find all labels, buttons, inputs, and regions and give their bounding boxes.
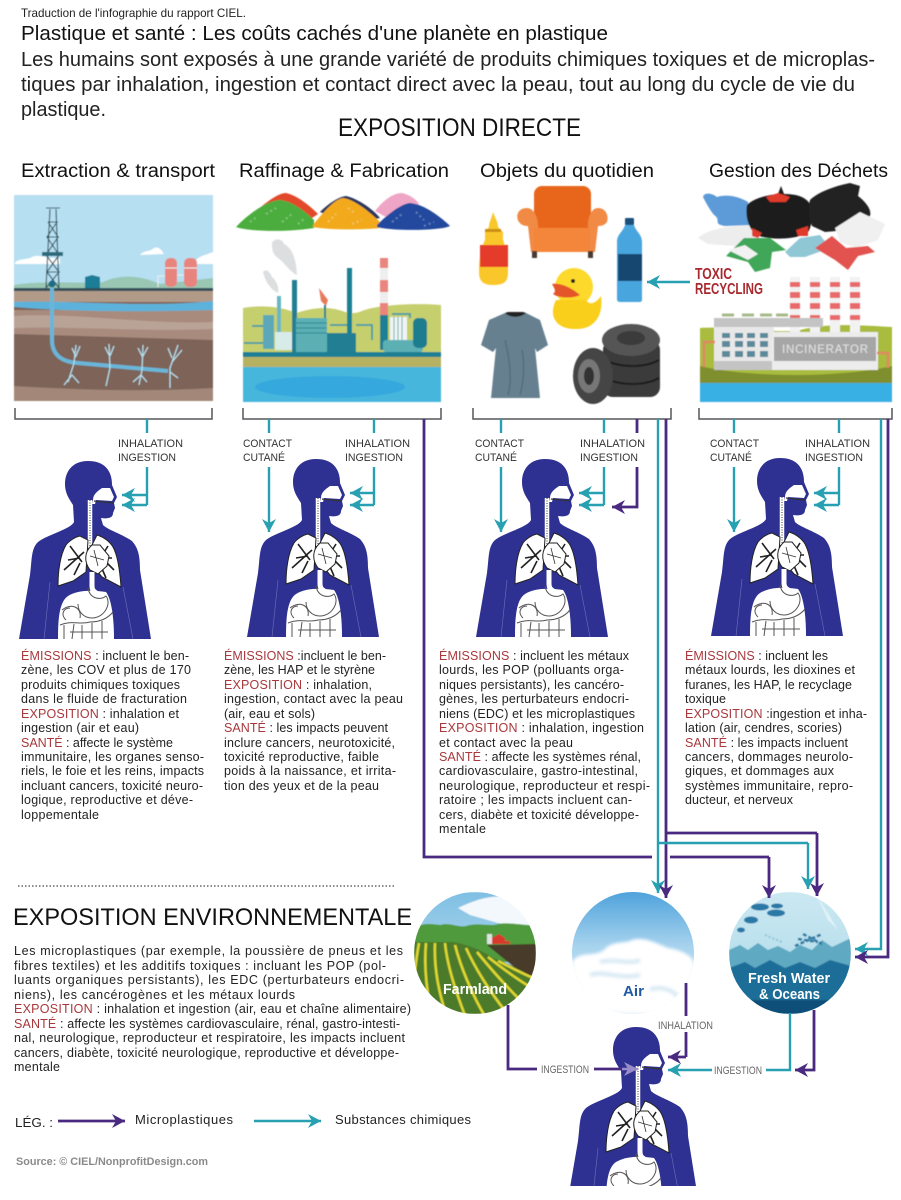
intro text (21, 49, 875, 121)
text block: environnement (14, 944, 411, 1074)
text block: déchets: lation (air, cendres, scories) (685, 721, 842, 735)
text block: extraction: ingestion (air et eau) (21, 721, 139, 735)
exposure routes panel 3: INGESTION (580, 452, 638, 464)
text block: extraction: produits chimiques toxiques (21, 678, 180, 692)
text block: objets (439, 648, 650, 836)
label: fresh water and oceans: & Oceans (759, 987, 820, 1003)
text block: environnement: niens), les cancérogènes et les métaux lourds (14, 988, 295, 1002)
ingestion path from farmland (508, 1005, 638, 1076)
text block: raffinage: inclure cancers, neurotoxicité, (224, 736, 395, 750)
source: Source: © CIEL/NonprofitDesign.com (16, 1156, 208, 1168)
text block: déchets: toxique (685, 692, 726, 706)
intro text: tiques par inhalation, ingestion et contact direct avec la peau, tout au long du cycle de vie du (21, 74, 855, 96)
title: Plastique et santé : Les coûts cachés d'une planète en plastique (21, 23, 608, 45)
circle: fresh water and oceans (729, 892, 851, 1014)
text block: extraction: zène, les COV et plus de 170 (21, 663, 191, 677)
ingestion path from water: INGESTION (714, 1065, 762, 1077)
exposure routes panel 2: CUTANÉ (243, 451, 285, 464)
exposure routes panel 3: CUTANÉ (475, 451, 517, 464)
text block: déchets: métaux lourds, les dioxines et (685, 663, 856, 677)
text block: environnement: fibres textiles) et les additifs toxiques : incluant les POP (pol- (14, 959, 386, 973)
label: air: Air (623, 984, 644, 1000)
brackets under images (15, 408, 892, 419)
text block: déchets: ducteur, et nerveux (685, 793, 794, 807)
text block: environnement: cancers, diabète, toxicité neurologique, reproductive et développe- (14, 1046, 399, 1060)
exposure routes panel 4: INGESTION (805, 452, 863, 464)
exposure routes panel 1: INHALATION (118, 438, 183, 450)
text block: extraction: SANTÉ : affecte le système (21, 735, 173, 750)
text block: environnement: SANTÉ : affecte les systèmes cardiovasculaire, rénal, gastro-intesti- (14, 1016, 400, 1031)
text block: extraction (21, 648, 204, 822)
illustration: plastic pellets (236, 193, 450, 231)
text block: déchets: systèmes immunitaire, repro- (685, 779, 853, 793)
text block: objets: gènes, les perturbateurs endocri- (439, 692, 629, 706)
exposure routes panel 1: INGESTION (118, 452, 176, 464)
ingestion path from water (668, 1010, 814, 1077)
illustration: refinery (243, 239, 441, 402)
exposure routes panel 2: INHALATION (345, 438, 410, 450)
text block: déchets: cancers, dommages neurolo- (685, 750, 853, 764)
text block: environnement: mentale (14, 1060, 60, 1074)
text block: objets: niens (EDC) et les microplastiques (439, 707, 635, 721)
text block: extraction: ÉMISSIONS : incluent le ben- (21, 648, 189, 663)
human body 4 (711, 458, 843, 636)
exposure routes panel 3: INHALATION (580, 438, 645, 450)
exposure routes panel 4: INHALATION (805, 438, 870, 450)
human body: environmental exposure (570, 1027, 696, 1186)
exposure routes panel 4 (710, 419, 870, 532)
text block: objets: neurologique, reproducteur et respi- (439, 779, 650, 793)
text block: objets: cers, diabète et toxicité développe- (439, 808, 639, 822)
text block: extraction: dans le fluide de fracturation (21, 692, 187, 706)
label: toxic recycling: RECYCLING (695, 281, 763, 298)
text block: objets: lourds, les POP (polluants orga- (439, 663, 624, 677)
illustration: mustard bottle (479, 212, 508, 285)
exposure routes panel 4: CONTACT (710, 438, 759, 450)
arrow: recycling to objects (647, 281, 690, 283)
text block: raffinage: SANTÉ : les impacts peuvent (224, 720, 389, 735)
label: fresh water and oceans (748, 971, 830, 1003)
text block: objets: mentale (439, 822, 486, 836)
text block: extraction: EXPOSITION : inhalation et (21, 707, 180, 721)
circle: air (572, 892, 694, 1014)
inhalation path from air (658, 983, 713, 1057)
text block: déchets: giques, et dommages aux (685, 764, 835, 778)
column heading: objets: Objets du quotidien (480, 161, 654, 182)
exposure routes panel 3 (475, 419, 645, 532)
legend: LÉG. : (15, 1115, 53, 1130)
credit line: Traduction de l'infographie du rapport CIEL. (21, 6, 246, 20)
illustration: incinerator: INCINERATOR (782, 344, 868, 356)
text block: raffinage: tion des yeux et de la peau (224, 779, 379, 793)
text block: extraction: logique, reproductive et déve- (21, 793, 193, 807)
text block: environnement: Les microplastiques (par exemple, la poussière de pneus et les (14, 944, 403, 958)
label: farmland: Farmland (443, 982, 507, 998)
column heading: extraction: Extraction & transport (21, 161, 216, 182)
intro text: Les humains sont exposés à une grande variété de produits chimiques toxiques et de microplas- (21, 49, 875, 71)
text block: objets: SANTÉ : affecte les systèmes rénal, (439, 749, 641, 764)
human body 3 (476, 459, 608, 637)
label: toxic recycling (695, 266, 763, 298)
circle: farmland (414, 892, 540, 1018)
legend: Microplastiques (135, 1112, 234, 1127)
exposure routes panel 2: CONTACT (243, 438, 292, 450)
text block: raffinage: toxicité reproductive, faible (224, 750, 379, 764)
human body 1 (19, 461, 151, 639)
label: fresh water and oceans: Fresh Water (748, 971, 830, 987)
text block: raffinage: EXPOSITION : inhalation, (224, 678, 372, 692)
legend: Substances chimiques (335, 1112, 472, 1127)
text block: environnement: EXPOSITION : inhalation et ingestion (air, eau et chaîne alimentaire) (14, 1002, 411, 1016)
text block: extraction: loppementale (21, 808, 99, 822)
heading: exposition directe: EXPOSITION DIRECTE (338, 114, 581, 142)
text block: objets: et contact avec la peau (439, 736, 573, 750)
text block: déchets (685, 648, 867, 807)
text block: extraction: incluant cancers, toxicité neuro- (21, 779, 203, 793)
illustration: oil drilling and fracking (14, 195, 213, 401)
illustration: armchair (517, 186, 608, 258)
illustration: water bottle (617, 218, 642, 302)
text block: déchets: furanes, les HAP, le recyclage (685, 678, 852, 692)
text block: raffinage: zène, les HAP et le styrène (224, 663, 375, 677)
text block: objets: niques persistants), les cancéro- (439, 678, 624, 692)
exposure routes panel 4: CUTANÉ (710, 451, 752, 464)
text block: extraction: riels, le foie et les reins, impacts (21, 764, 204, 778)
intro text: plastique. (21, 99, 106, 121)
column heading: raffinage: Raffinage & Fabrication (239, 161, 449, 182)
illustration: t-shirt (481, 312, 548, 398)
illustration: waste bags (698, 183, 885, 272)
text block: raffinage: ÉMISSIONS :incluent le ben- (224, 648, 386, 663)
legend (15, 1112, 472, 1130)
text block: extraction: immunitaire, les organes senso- (21, 750, 204, 764)
text block: objets: EXPOSITION : inhalation, ingestion (439, 721, 644, 735)
exposure routes panel 2: INGESTION (345, 452, 403, 464)
text block: raffinage: (air, eau et sols) (224, 707, 315, 721)
text block: objets: ÉMISSIONS : incluent les métaux (439, 648, 630, 663)
illustration: incinerator (700, 277, 892, 402)
text block: déchets: EXPOSITION :ingestion et inha- (685, 707, 867, 721)
label: toxic recycling: TOXIC (695, 266, 732, 283)
column heading: déchets: Gestion des Déchets (709, 161, 888, 182)
text block: déchets: SANTÉ : les impacts incluent (685, 735, 849, 750)
heading: exposition environnementale: EXPOSITION ENVIRONNEMENTALE (13, 904, 412, 931)
dotted divider (18, 885, 396, 887)
illustration: tires (573, 324, 660, 404)
flow arrows to environment (424, 419, 888, 957)
text block: environnement: luants organiques persistants), les EDC (perturbateurs endocri- (14, 973, 404, 987)
text block: objets: ratoire ; les impacts incluent can- (439, 793, 632, 807)
text block: raffinage: ingestion, contact avec la peau (224, 692, 403, 706)
text block: environnement: nal, neurologique, reproducteur et respiratoire, les impacts incluent (14, 1031, 406, 1045)
illustration: rubber duck (552, 268, 601, 329)
exposure routes panel 3: CONTACT (475, 438, 524, 450)
exposure routes panel 2 (243, 419, 410, 532)
text block: objets: cardiovasculaire, gastro-intestinal, (439, 764, 638, 778)
text block: raffinage (224, 648, 403, 793)
human body 2 (247, 459, 379, 637)
ingestion path from farmland: INGESTION (541, 1064, 589, 1076)
exposure routes panel 1 (118, 419, 183, 505)
inhalation path from air: INHALATION (658, 1020, 713, 1032)
text block: déchets: ÉMISSIONS : incluent les (685, 648, 828, 663)
text block: raffinage: poids à la naissance, et irrita- (224, 764, 396, 778)
